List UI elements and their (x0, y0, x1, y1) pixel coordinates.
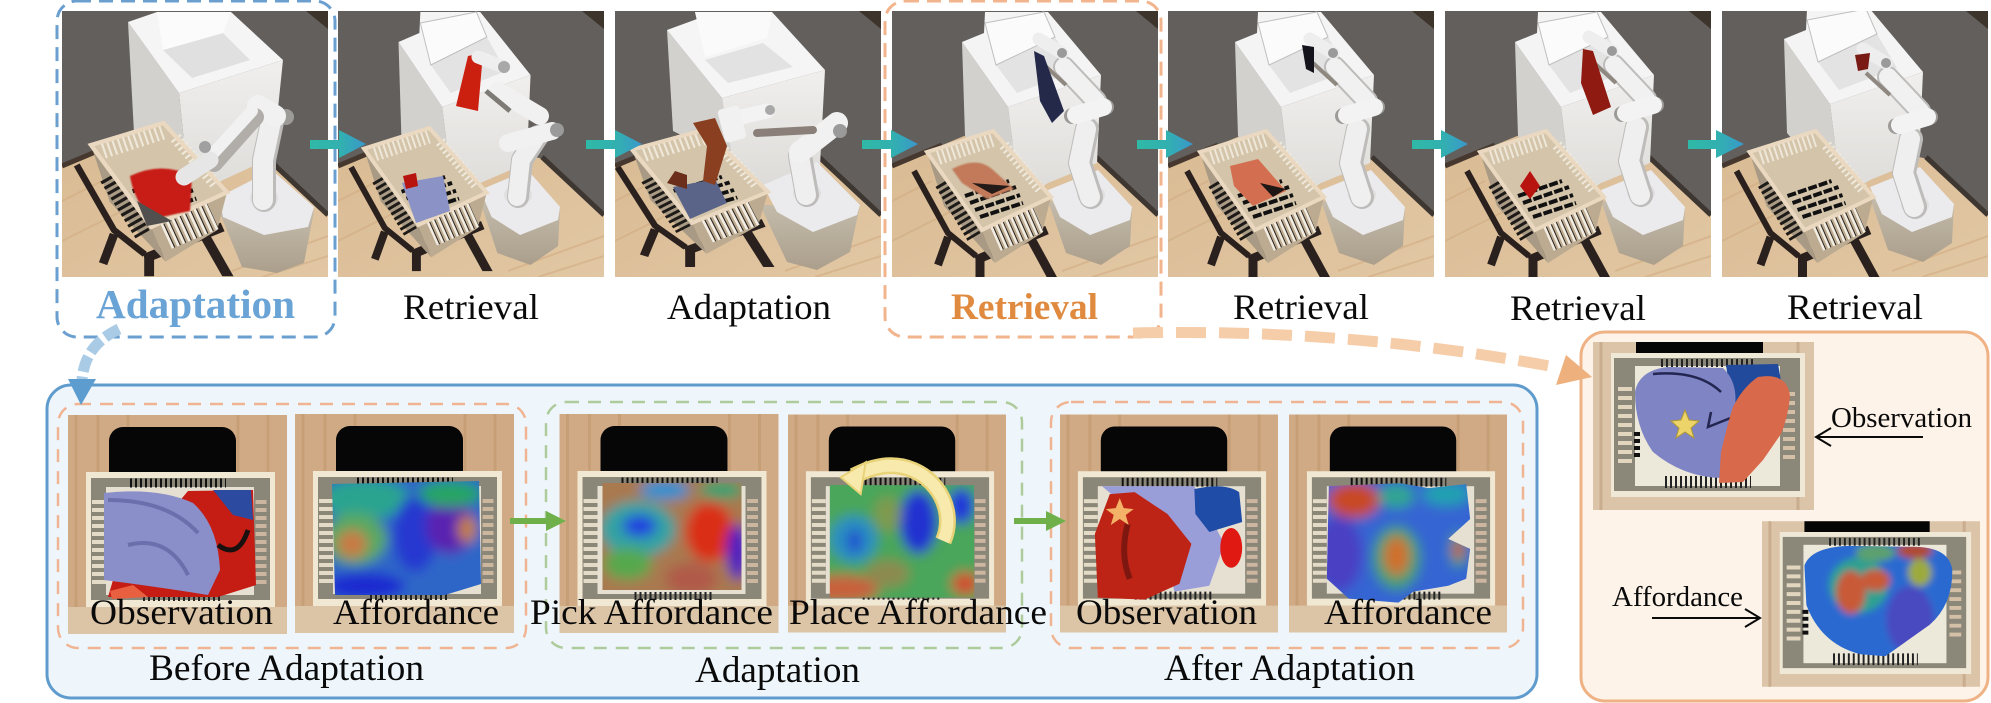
label: affordance with arrow: Affordance (1612, 582, 1743, 613)
photo 1: adaptation, gripper in basket (62, 11, 328, 277)
image labels: Affordance (1324, 592, 1492, 632)
step labels: Adaptation (667, 287, 831, 327)
label: affordance with arrow (1612, 582, 1760, 627)
step labels: Adaptation (96, 281, 295, 327)
step labels: Retrieval (1233, 287, 1369, 327)
green arrows (510, 511, 1066, 531)
group captions (149, 648, 1415, 691)
group box: before adaptation (58, 404, 526, 648)
arrows between photos (310, 130, 1744, 158)
image: after affordance (1289, 414, 1507, 632)
arrow: retrieval to detail panel (1133, 332, 1592, 385)
photo 7: retrieval, basket nearly empty (1722, 11, 1988, 277)
image labels (90, 592, 1492, 632)
step labels (96, 281, 1923, 328)
image labels: Affordance (333, 592, 499, 632)
image: pick affordance (560, 414, 778, 633)
arrow: adaptation to detail panel (68, 329, 119, 405)
label: observation with arrow: Observation (1831, 403, 1972, 434)
image: place affordance with motion arrow (788, 414, 1006, 632)
dashed highlight: adaptation step (57, 1, 335, 337)
step labels: Retrieval (1787, 287, 1923, 327)
icon: curved motion arrow (841, 462, 947, 541)
photo 3: adaptation, garment reoriented (615, 11, 881, 277)
photo 6: retrieval, dark red garment (1445, 11, 1711, 277)
photo strip: robot retrieval sequence (62, 9, 1988, 281)
photo 2: retrieval, red garment lifted (338, 11, 604, 277)
panel: retrieval detail (1581, 332, 1988, 701)
image: retrieval observation (1593, 342, 1814, 510)
step labels: Retrieval (1510, 288, 1646, 328)
group captions: Adaptation (695, 650, 860, 691)
panel: adaptation detail (47, 385, 1537, 698)
group box: adaptation (546, 402, 1022, 648)
label: observation with arrow (1816, 403, 1972, 446)
image labels: Observation (1076, 592, 1257, 632)
image: retrieval affordance (1762, 521, 1980, 687)
step labels: Retrieval (951, 287, 1098, 328)
photo 5: retrieval, small dark garment (1168, 11, 1434, 277)
image labels: Place Affordance (789, 592, 1047, 632)
photo 4: retrieval, navy garment lifted (892, 11, 1158, 277)
image: after observation (1060, 414, 1278, 632)
image: before affordance (295, 414, 514, 633)
group captions: Before Adaptation (149, 648, 424, 689)
group captions: After Adaptation (1164, 648, 1415, 689)
image labels: Observation (90, 592, 273, 632)
image labels: Pick Affordance (530, 592, 773, 632)
image: before observation (68, 415, 287, 634)
step labels: Retrieval (403, 287, 539, 327)
group box: after adaptation (1051, 402, 1523, 648)
dashed highlight: retrieval step (885, 1, 1161, 337)
